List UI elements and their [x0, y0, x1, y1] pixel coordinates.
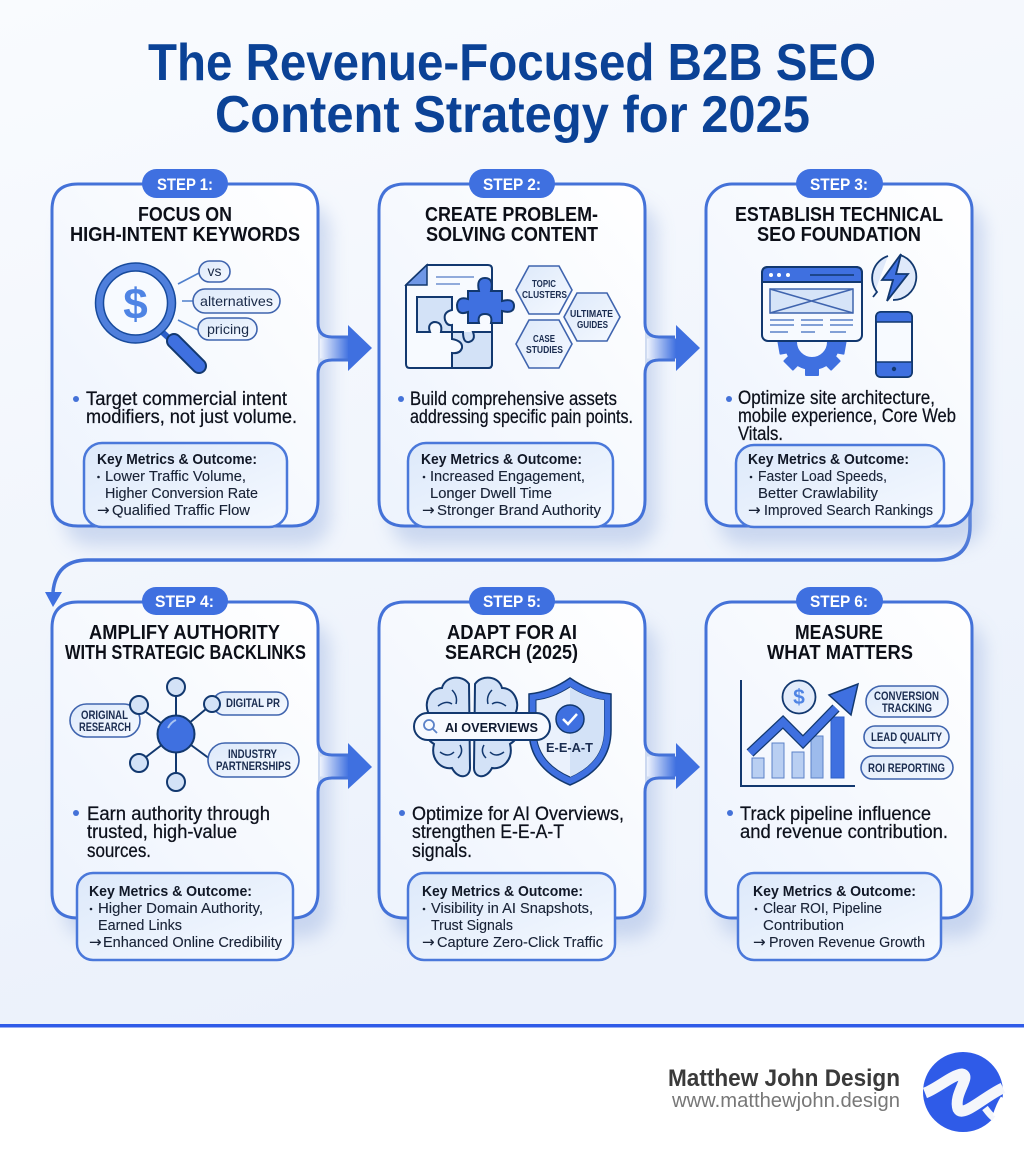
- step 4 bullet text: Earn authority through: [87, 804, 270, 825]
- step 1 bullet text: [73, 389, 297, 428]
- step 5 bullet text: Optimize for AI Overviews,: [412, 804, 624, 825]
- step 4 bullet text: sources.: [87, 841, 151, 862]
- step 2 badge: STEP 2:: [483, 175, 541, 194]
- step 2 heading: [425, 204, 598, 246]
- footer brand text: www.matthewjohn.design: [671, 1090, 900, 1112]
- step 4 metrics box: →: [89, 933, 102, 951]
- step 6 heading: MEASURE: [795, 622, 883, 644]
- step 2 heading: SOLVING CONTENT: [426, 224, 598, 246]
- icon: document with puzzle pieces: [406, 265, 514, 368]
- step 5 metrics box: Trust Signals: [431, 917, 513, 934]
- step 5 metrics box: →: [422, 933, 435, 951]
- step 6 metrics box: Proven Revenue Growth: [769, 934, 925, 951]
- step 1 metrics box: Key Metrics & Outcome:: [97, 451, 257, 468]
- step 5 heading: [445, 622, 578, 664]
- step 2 badge: [469, 169, 555, 198]
- step 4 metrics box: Enhanced Online Credibility: [103, 934, 282, 951]
- icon: magnifier with dollar: $: [123, 280, 148, 329]
- step 6 bullet text: Track pipeline influence: [740, 804, 931, 825]
- arrow: step 4 to step 5: [320, 743, 372, 789]
- step 3 bullet text: Vitals.: [738, 424, 783, 445]
- step 3 metrics box: Improved Search Rankings: [764, 502, 933, 519]
- step 6 metrics box: Contribution: [763, 917, 844, 934]
- step 4 metrics box: Earned Links: [98, 917, 182, 934]
- step 5 badge: [469, 587, 555, 615]
- step 5 bullet text: strengthen E-E-A-T: [412, 822, 564, 843]
- step 3 metrics box: Faster Load Speeds,: [758, 468, 887, 485]
- icon: AI overviews search bar: [414, 713, 550, 740]
- step 4 bullet text: trusted, high-value: [87, 822, 237, 843]
- title: [148, 34, 876, 144]
- step 2 heading: CREATE PROBLEM-: [425, 204, 598, 226]
- step 1 heading: FOCUS ON: [138, 204, 232, 226]
- step 4 badge: STEP 4:: [155, 592, 214, 611]
- step 3 bullet text: Optimize site architecture,: [738, 388, 935, 409]
- footer: [0, 1024, 1024, 1154]
- step 2 bullet text: [398, 389, 633, 428]
- icon: content type hexagons: GUIDES: [577, 320, 608, 331]
- step 3 badge: STEP 3:: [810, 175, 868, 194]
- step 1 heading: HIGH-INTENT KEYWORDS: [70, 224, 300, 246]
- arrow: step 5 to step 6: [647, 743, 700, 789]
- step 5 metrics box: Visibility in AI Snapshots,: [431, 900, 593, 917]
- step 5 heading: ADAPT FOR AI: [447, 622, 577, 644]
- icon: backlink source pills: PARTNERSHIPS: [216, 761, 291, 773]
- step 2 bullet text: Build comprehensive assets: [410, 389, 617, 410]
- step 1 metrics box: Qualified Traffic Flow: [112, 502, 250, 519]
- step 4 metrics box: Higher Domain Authority,: [98, 900, 263, 917]
- icon: phone: [876, 312, 912, 377]
- step 6 heading: WHAT MATTERS: [767, 642, 913, 664]
- step 2 metrics box: Longer Dwell Time: [430, 485, 552, 502]
- step 6 metrics box: Key Metrics & Outcome:: [753, 883, 916, 900]
- step 4 heading: [65, 622, 306, 664]
- icon: growth chart: [741, 680, 858, 786]
- icon: content type hexagons: CLUSTERS: [522, 290, 567, 301]
- icon: keyword pills: pricing: [207, 321, 249, 337]
- step 3 metrics box: Key Metrics & Outcome:: [748, 451, 909, 468]
- icon: content type hexagons: CASE: [533, 334, 555, 345]
- step 4 metrics box: Key Metrics & Outcome:: [89, 883, 252, 900]
- step 4 heading: AMPLIFY AUTHORITY: [89, 622, 281, 644]
- icon: E-E-A-T shield: E-E-A-T: [546, 740, 593, 755]
- icon: backlink source pills: DIGITAL PR: [226, 698, 281, 710]
- step 6 bullet text: and revenue contribution.: [740, 822, 948, 843]
- icon: AI overviews search bar: AI OVERVIEWS: [445, 720, 538, 735]
- step 1 heading: [70, 204, 300, 246]
- icon: measurement pills: TRACKING: [882, 703, 932, 715]
- step 1 metrics box: Lower Traffic Volume,: [105, 468, 246, 485]
- step 3 badge: [796, 169, 883, 198]
- step 5 bullet text: signals.: [412, 841, 472, 862]
- step 1 metrics box: [84, 443, 287, 527]
- arrow: step 1 to step 2: [320, 325, 372, 371]
- panel: step 5: [379, 587, 675, 960]
- step 5 heading: SEARCH (2025): [445, 642, 578, 664]
- icon: backlink source pills: RESEARCH: [79, 722, 131, 734]
- step 2 metrics box: →: [422, 501, 435, 519]
- icon: backlink source pills: ORIGINAL: [81, 710, 128, 722]
- icon: backlink source pills: INDUSTRY: [228, 749, 277, 761]
- icon: magnifier with dollar: [96, 263, 199, 366]
- icon: keyword pills: vs: [208, 263, 222, 279]
- step 6 badge: [796, 587, 883, 615]
- step 6 bullet text: [727, 804, 948, 843]
- icon: gear: [777, 320, 847, 376]
- panel: step 3: [706, 169, 984, 546]
- loop connector from step 3 to step 4: [45, 505, 970, 607]
- step 3 metrics box: [736, 445, 944, 527]
- step 6 metrics box: [738, 873, 941, 960]
- icon: backlink network: [130, 678, 210, 791]
- step 1 metrics box: Higher Conversion Rate: [105, 485, 258, 502]
- step 3 heading: ESTABLISH TECHNICAL: [735, 204, 943, 226]
- icon: growth chart: $: [793, 686, 805, 709]
- step 2 metrics box: Stronger Brand Authority: [437, 502, 601, 519]
- icon: backlink source pills: [70, 692, 299, 777]
- step 3 metrics box: Better Crawlability: [758, 485, 878, 502]
- panel: step 4: [52, 587, 348, 960]
- step 1 badge: STEP 1:: [157, 175, 213, 194]
- icon: measurement pills: CONVERSION: [874, 691, 939, 703]
- step 1 bullet text: Target commercial intent: [86, 389, 288, 410]
- step 3 bullet text: mobile experience, Core Web: [738, 406, 956, 427]
- step 2 metrics box: [408, 443, 613, 527]
- step 1 metrics box: →: [97, 501, 110, 519]
- footer brand text: [668, 1065, 900, 1112]
- icon: measurement pills: [861, 686, 953, 779]
- icon: content type hexagons: TOPIC: [532, 279, 556, 290]
- step 4 badge: [142, 587, 228, 615]
- icon: measurement pills: ROI REPORTING: [868, 763, 945, 775]
- step 3 bullet text: [726, 388, 956, 445]
- step 5 metrics box: Key Metrics & Outcome:: [422, 883, 583, 900]
- title: Content Strategy for 2025: [215, 86, 810, 144]
- step 4 metrics box: [77, 873, 293, 960]
- icon: lightning speed: [872, 254, 916, 301]
- title: The Revenue-Focused B2B SEO: [148, 34, 876, 92]
- icon: brain: [424, 678, 520, 776]
- step 6 metrics box: Clear ROI, Pipeline: [763, 900, 882, 917]
- icon: keyword pills: alternatives: [200, 293, 273, 309]
- step 5 badge: STEP 5:: [483, 592, 541, 611]
- step 2 metrics box: Key Metrics & Outcome:: [421, 451, 582, 468]
- step 6 heading: [767, 622, 913, 664]
- icon: E-E-A-T shield: [529, 678, 611, 785]
- icon: content type hexagons: ULTIMATE: [570, 309, 613, 320]
- step 3 heading: SEO FOUNDATION: [757, 224, 921, 246]
- panel: step 1: [52, 169, 348, 546]
- icon: browser window: [762, 267, 862, 341]
- icon: content type hexagons: STUDIES: [526, 345, 563, 356]
- panel: step 6: [706, 587, 984, 960]
- step 4 heading: WITH STRATEGIC BACKLINKS: [65, 642, 306, 664]
- icon: keyword pills: [178, 261, 280, 340]
- step 5 bullet text: [399, 804, 624, 862]
- icon: content type hexagons: [516, 266, 620, 368]
- step 5 metrics box: Capture Zero-Click Traffic: [437, 934, 603, 951]
- step 1 badge: [142, 169, 228, 198]
- step 6 metrics box: →: [753, 933, 766, 951]
- step 5 metrics box: [408, 873, 615, 960]
- icon: logo: [923, 1052, 1003, 1132]
- step 2 bullet text: addressing specific pain points.: [410, 407, 633, 428]
- step 2 metrics box: Increased Engagement,: [430, 468, 585, 485]
- step 3 heading: [735, 204, 943, 246]
- arrow: step 2 to step 3: [647, 325, 700, 371]
- panel: step 2: [379, 169, 675, 546]
- step 3 metrics box: →: [748, 501, 761, 519]
- icon: measurement pills: LEAD QUALITY: [871, 732, 942, 744]
- step 6 badge: STEP 6:: [810, 592, 868, 611]
- step 1 bullet text: modifiers, not just volume.: [86, 407, 297, 428]
- footer brand text: Matthew John Design: [668, 1065, 900, 1092]
- step 4 bullet text: [73, 804, 270, 862]
